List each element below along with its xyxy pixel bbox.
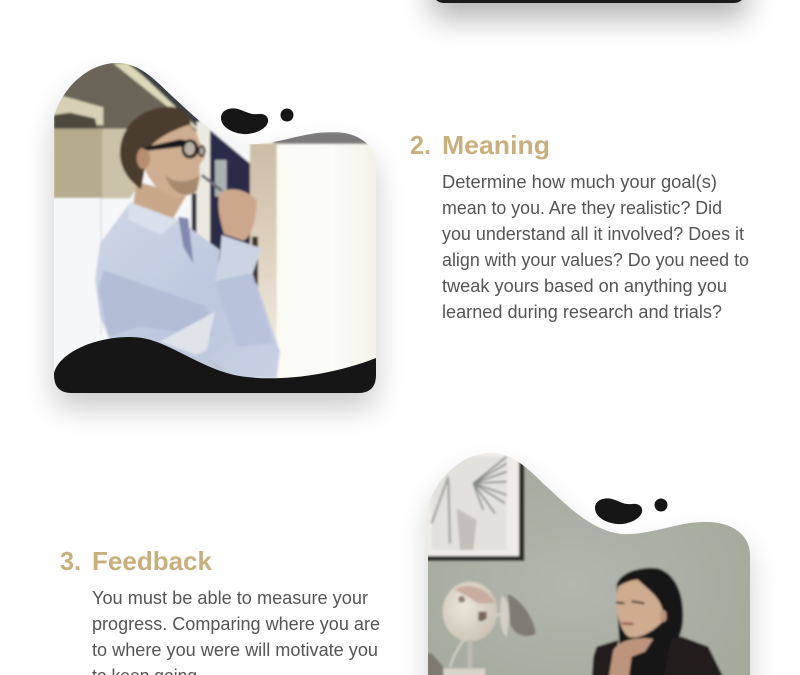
panel: top card remnant [432,0,746,18]
glasses [142,139,187,151]
text block: meaning description [442,172,749,322]
black dot [280,108,294,122]
black bottom wave [54,337,376,393]
text block: meaning description: mean to you. Are they realistic? Did [442,198,722,218]
text block: feedback description: to where you were will motivate you [92,640,378,660]
text block: meaning description: learned during research and trials? [442,302,722,322]
desk globe [443,582,497,642]
hair [617,568,683,675]
black dot [654,498,668,512]
text block: meaning description: tweak yours based on anything you [442,276,727,296]
lamp [450,613,502,667]
text block: feedback description [92,588,380,675]
black blob [221,108,268,134]
heading: 3. Feedback: 3. [60,546,81,576]
loose hair [648,640,670,675]
photo: man thinking with pen [54,63,376,393]
text block: feedback description: progress. Comparing where you are [92,614,380,634]
hand and arm [608,638,653,675]
photo: woman thinking at desk [428,453,750,675]
picture frame [428,462,526,562]
text block: feedback description: You must be able to measure your [92,588,368,608]
shirt [95,203,280,378]
text block: meaning description: Determine how much your goal(s) [442,172,717,192]
jacket [592,637,722,675]
face [616,579,663,637]
eyes and mouth [616,601,644,603]
pen and hand [202,175,222,191]
heading: 3. Feedback: Feedback [92,546,213,576]
text block: meaning description: you understand all it involved? Does it [442,224,744,244]
black blob [595,498,642,524]
text block: meaning description: align with your values? Do you need to [442,250,749,270]
heading: 2. Meaning: Meaning [442,130,550,160]
heading: 2. Meaning: 2. [410,130,431,160]
panel: meaning photo card [40,50,390,410]
panel: feedback photo card [415,440,765,675]
neck and head [133,182,187,218]
